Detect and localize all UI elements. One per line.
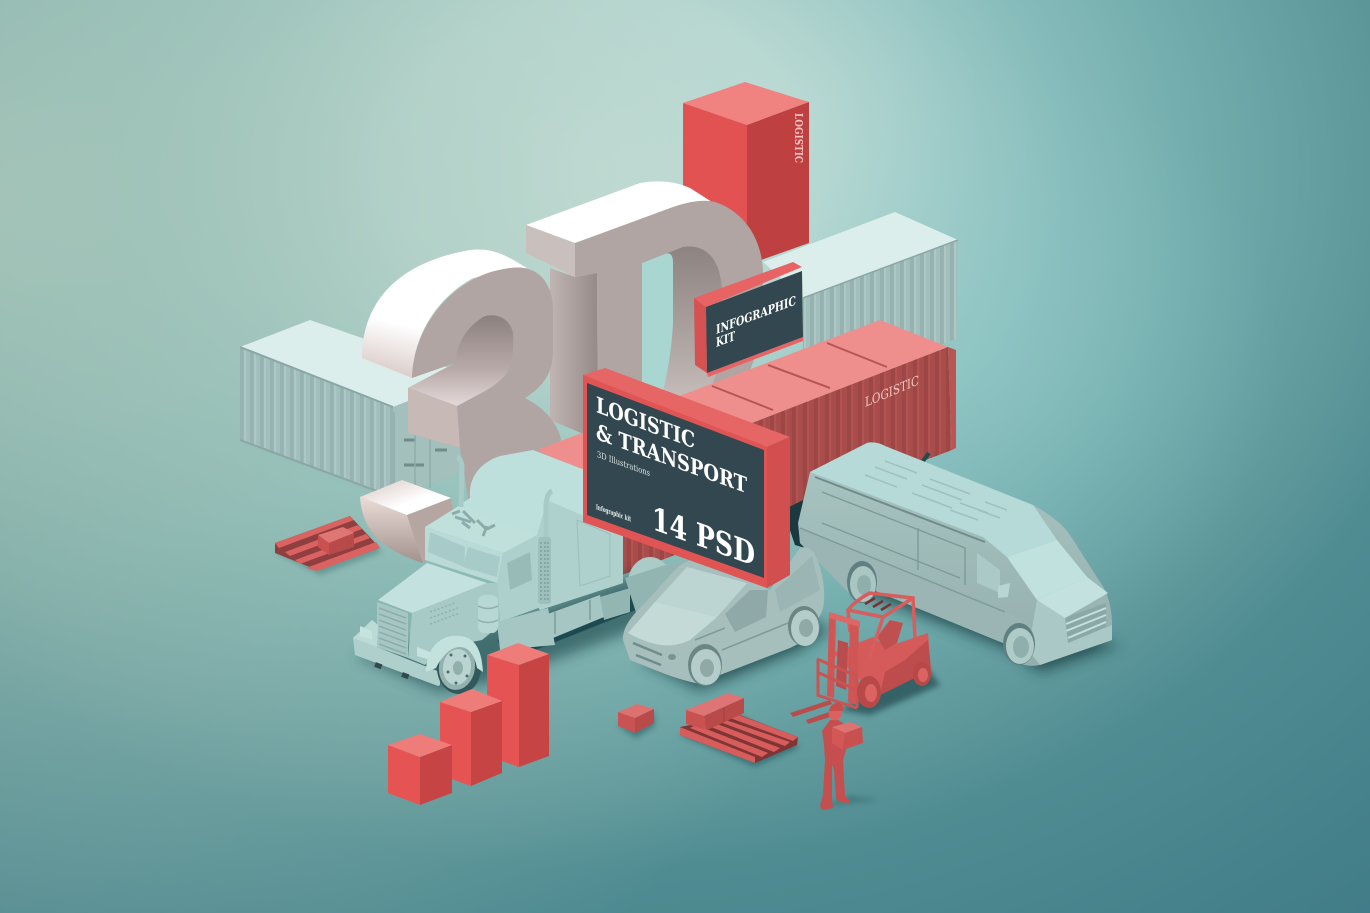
red bar chart of boxes [388, 643, 549, 805]
small van [623, 547, 830, 690]
label: middle bar [440, 689, 502, 786]
label: chassis frame, fuel tank and steps [497, 588, 630, 650]
label: shortest bar [388, 734, 452, 805]
light container, right [763, 212, 958, 398]
label: roof horns [452, 511, 495, 536]
label: van wheels [688, 606, 820, 686]
label: 14 PSD: 14 PSD [652, 499, 755, 574]
left pallet with box [275, 516, 382, 575]
label: mast [827, 612, 860, 705]
label: small caption: Infographic kit [596, 502, 631, 524]
label: body and legs [820, 720, 850, 810]
label: tail of the 3 [360, 480, 458, 563]
light container, left [240, 320, 472, 497]
label: subtitle: 3D Illustrations [597, 450, 650, 479]
label: heading: & TRANSPORT [596, 420, 747, 499]
big numeral 3 [360, 249, 562, 563]
label: van body [623, 547, 824, 684]
label: rear wheels [625, 557, 690, 625]
big letter D [526, 181, 763, 440]
label: hood [377, 563, 500, 665]
small box [618, 704, 655, 738]
label: overhead cage [848, 593, 915, 657]
label: cab [425, 507, 541, 622]
label: front fender and wheel [426, 636, 483, 694]
label: forks [790, 700, 833, 724]
worker carrying box [820, 703, 880, 810]
label: battery cylinder [478, 595, 498, 633]
truck [353, 450, 690, 694]
label: van wheels [847, 561, 1035, 665]
label: carried box [832, 722, 863, 750]
label: LOGISTIC on container: LOGISTIC [865, 373, 919, 411]
large sign: Logistic & Transport [583, 368, 790, 588]
label: LOGISTIC on box: LOGISTIC [792, 113, 805, 163]
forklift [790, 593, 940, 724]
label: forklift body [833, 633, 931, 695]
label: windshield and roof [655, 567, 747, 617]
label: side window [725, 590, 768, 632]
label: rear panel [775, 556, 820, 612]
label: van lower sill [799, 528, 1030, 660]
label: head and cap [828, 703, 843, 720]
label: van hood and grille [1028, 577, 1112, 665]
label: van body side [798, 442, 1112, 666]
label: sleeper cab [457, 450, 623, 610]
label: exhaust stacks [457, 457, 552, 604]
label: van roof [810, 442, 1057, 557]
red shipping container [537, 320, 956, 575]
front pallet with boxes [680, 693, 800, 767]
label: fork carriage [817, 659, 857, 708]
label: sign text: KIT [716, 329, 735, 351]
label: sign text [716, 294, 796, 351]
label: heading: LOGISTIC [596, 393, 695, 454]
tall red box [683, 82, 809, 265]
label: hood and front [628, 602, 815, 665]
label: sign text: INFOGRAPHIC [716, 294, 796, 338]
label: windshield [1007, 540, 1087, 600]
label: box on pallet [318, 527, 354, 555]
small sign: Infographic Kit [694, 262, 803, 377]
label: van side details [800, 492, 1005, 612]
label: front bumper [353, 620, 440, 686]
label: tallest bar [487, 643, 549, 767]
large van [783, 442, 1120, 672]
label: heading [596, 393, 747, 499]
label: seat [877, 620, 903, 650]
label: boxes on pallet [686, 693, 744, 730]
label: wheels [857, 662, 931, 708]
